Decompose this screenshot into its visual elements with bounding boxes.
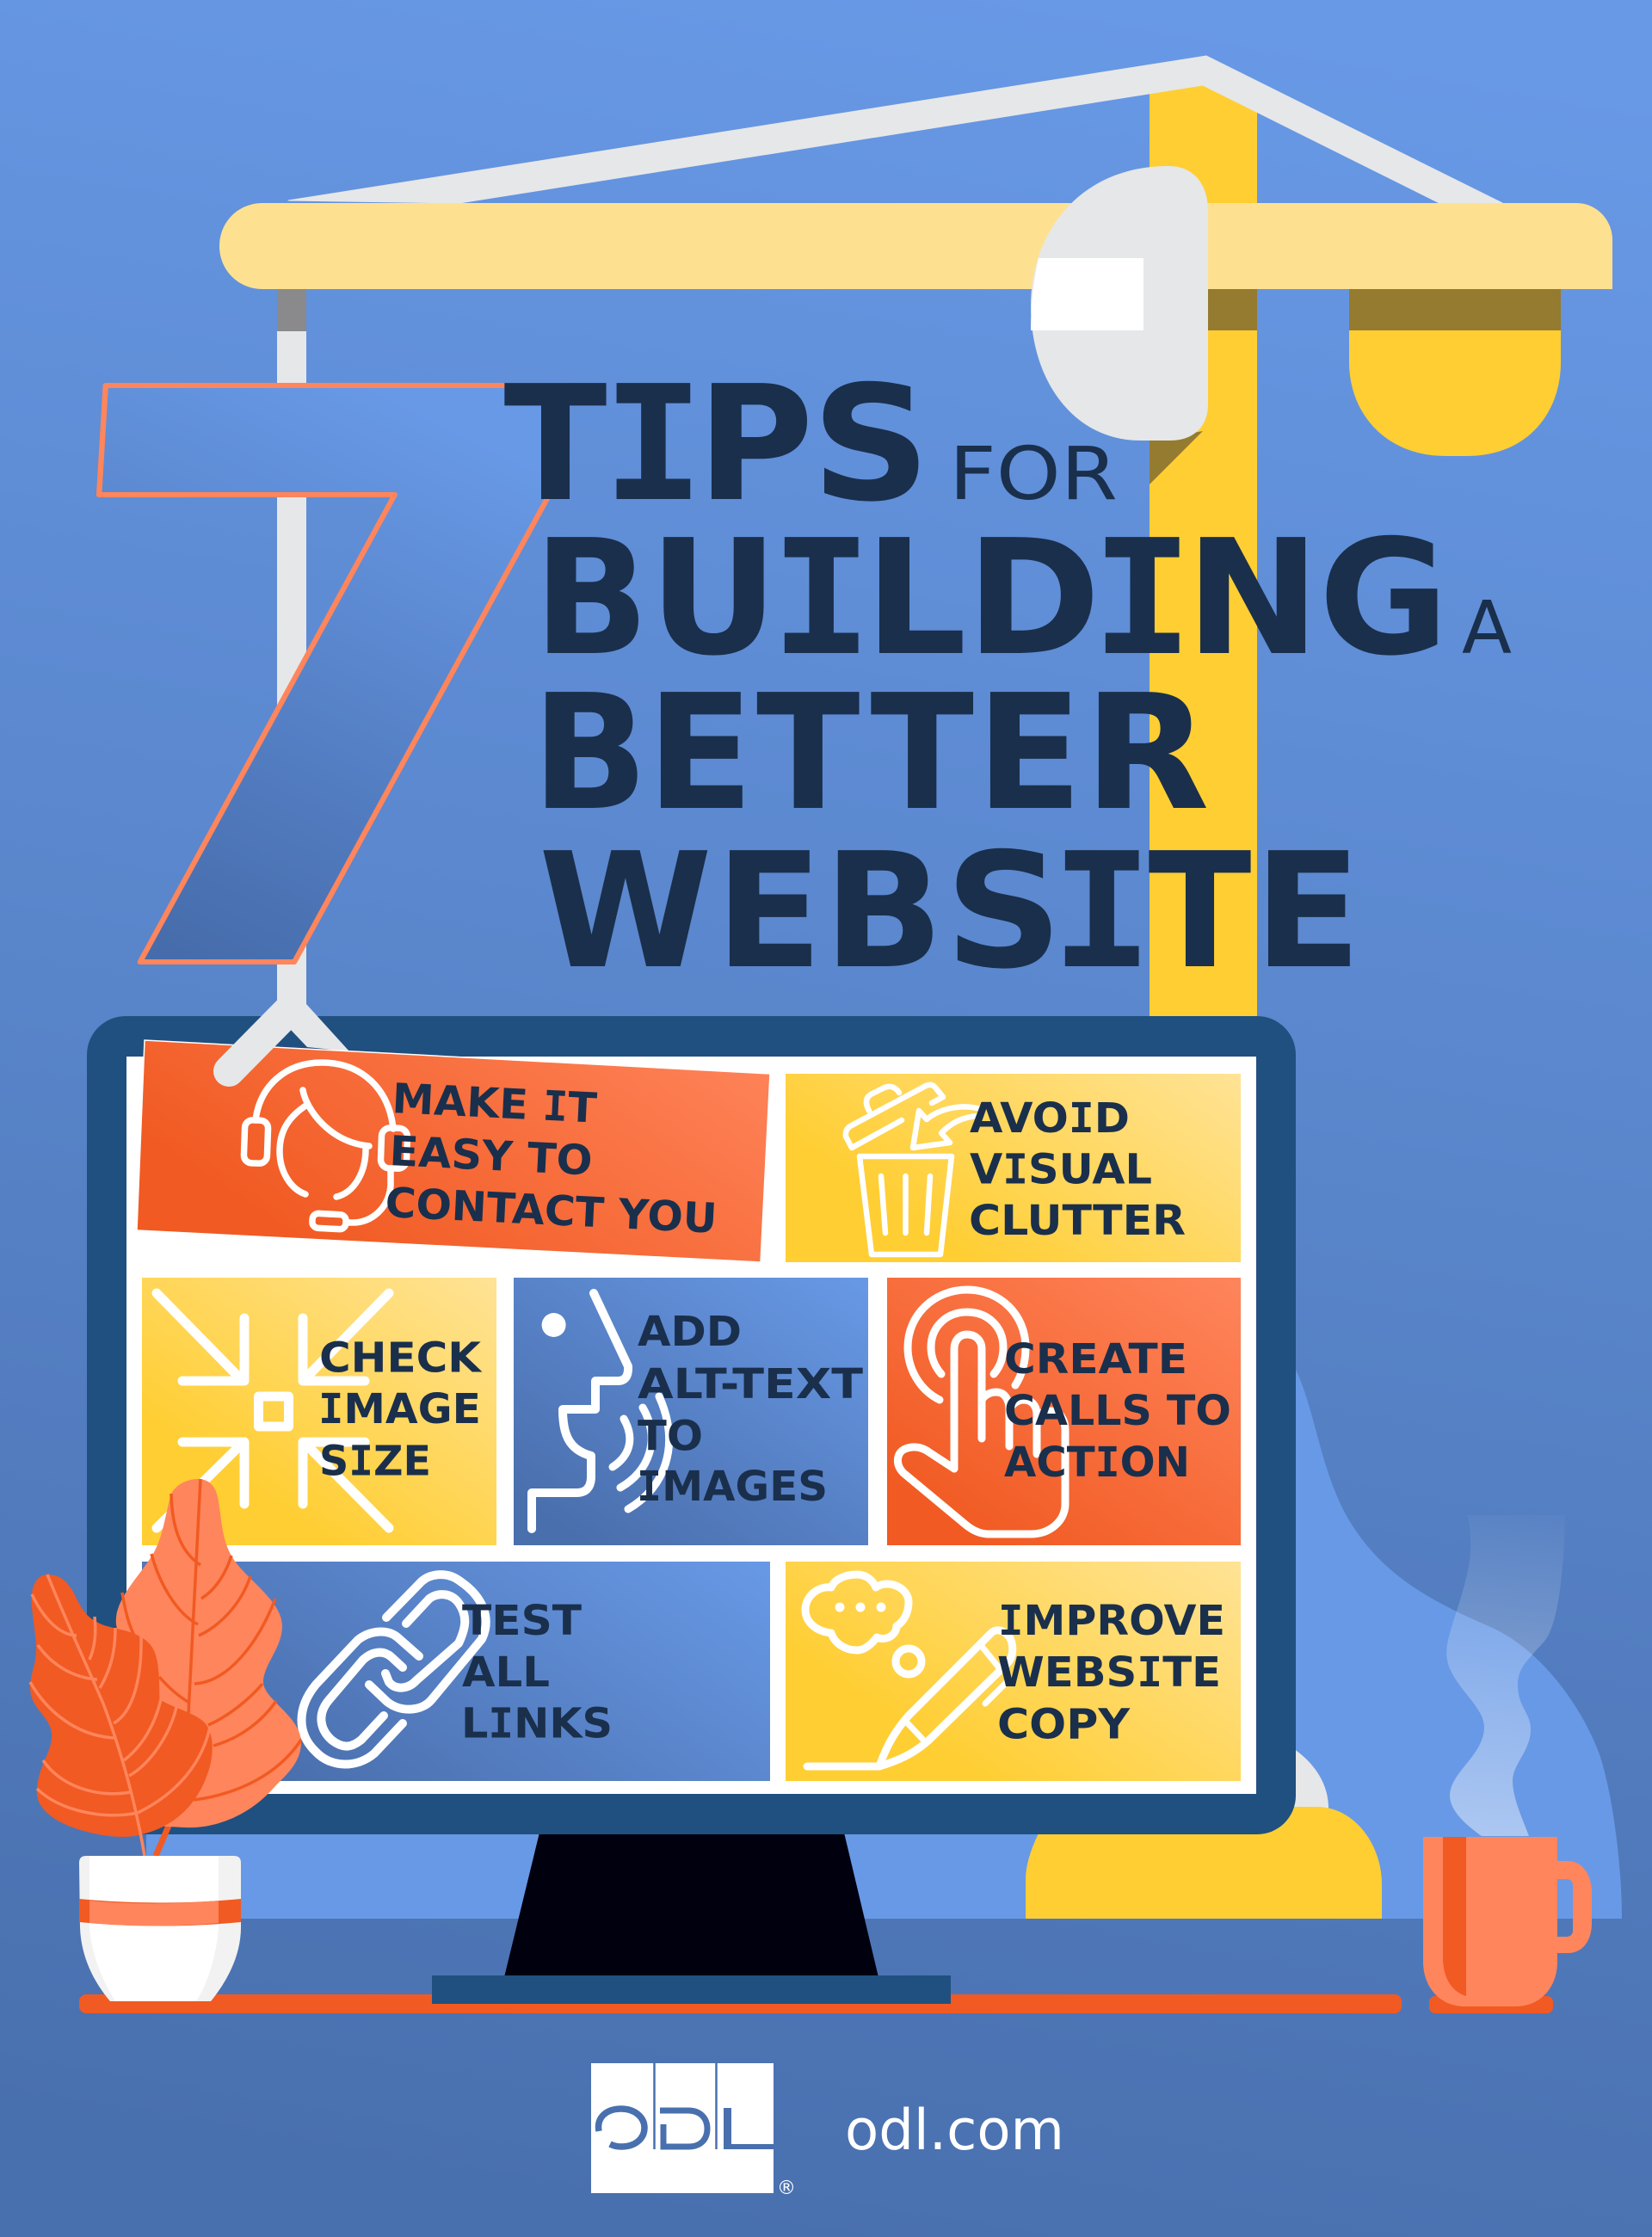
logo letter O: [599, 2109, 644, 2147]
tip text: LINKS: [461, 1700, 613, 1748]
tip text: IMAGES: [637, 1463, 828, 1511]
icon: headset agent: [243, 1063, 408, 1229]
desk surface: [79, 1994, 1402, 2013]
monitor frame: [87, 1016, 1296, 1834]
title line 4: I: [1051, 818, 1153, 1004]
tip text: AVOID: [970, 1094, 1130, 1143]
tip text: TEST: [462, 1597, 582, 1645]
title line 2: N: [1186, 505, 1320, 691]
title line 4: E: [1254, 818, 1361, 1004]
tip text: [318, 1334, 483, 1485]
tip text: [384, 1075, 718, 1243]
crane cabin: [1031, 166, 1208, 441]
title line 2: L: [865, 505, 967, 691]
logo square: [591, 2063, 774, 2193]
icon: thought cloud and pencil: [805, 1575, 1013, 1766]
tip text: CLUTTER: [969, 1197, 1186, 1245]
title line 3: E: [976, 660, 1082, 846]
tip text: CONTACT YOU: [384, 1179, 718, 1243]
coaster: [1429, 1996, 1553, 2013]
title line 1: FOR: [949, 432, 1118, 517]
back leaf: [116, 1479, 301, 1827]
panel: make it easy to contact you: [137, 1040, 770, 1262]
title line 1: I: [602, 351, 705, 537]
tip text: CHECK: [319, 1334, 483, 1382]
panel: test all links: [142, 1562, 770, 1781]
tip text: [1004, 1335, 1231, 1487]
title line 3: T: [756, 660, 860, 846]
ODL logo: [591, 2063, 796, 2199]
tip text: IMPROVE: [998, 1597, 1225, 1645]
monitor stand base: [432, 1975, 951, 2004]
title line 3: T: [871, 660, 974, 846]
tip text: [969, 1094, 1186, 1245]
counterweight shadow: [1349, 289, 1561, 330]
panel: create calls to action: [887, 1278, 1241, 1545]
logo dividers: [654, 2063, 716, 2149]
background hill: [146, 1368, 1622, 1919]
tip text: CALLS TO: [1004, 1387, 1231, 1435]
tip text: [461, 1597, 613, 1748]
mug handle: [1557, 1861, 1592, 1953]
tip text: SIZE: [319, 1437, 431, 1485]
title line 4: W: [539, 818, 712, 1004]
mug band: [1443, 1837, 1466, 1996]
crane arm shadow on tower: [1205, 289, 1257, 330]
crane hook left branch: [229, 1011, 288, 1071]
panel: improve website copy: [786, 1562, 1241, 1781]
steam: [1446, 1515, 1565, 1836]
rod lower part and right hook branch: [277, 331, 349, 1051]
stem: [156, 1826, 169, 1856]
title line 4: S: [945, 818, 1063, 1004]
tip text: ALL: [462, 1648, 550, 1697]
logo letter D: [660, 2111, 707, 2147]
crane hanging rod: [277, 289, 349, 1051]
title line 2: I: [770, 505, 872, 691]
tip text: EASY TO: [388, 1127, 594, 1186]
mug body: [1423, 1837, 1557, 2006]
tip text: COPY: [997, 1700, 1131, 1748]
tip text: ACTION: [1004, 1439, 1190, 1487]
tip text: ALT-TEXT: [638, 1360, 863, 1408]
pot: [79, 1856, 241, 2001]
panel: add alt-text to images: [514, 1278, 868, 1545]
icon: speaking profile: [532, 1293, 669, 1529]
icon: tapping hand: [897, 1290, 1065, 1534]
website address: odl.com: [845, 2098, 1064, 2163]
title line 2: [533, 505, 1512, 691]
panel: avoid visual clutter: [786, 1074, 1241, 1262]
tip text: VISUAL: [970, 1146, 1152, 1194]
tip text: [997, 1597, 1225, 1748]
title line 1: T: [504, 351, 607, 537]
icon: trash bin: [846, 1085, 981, 1254]
crane truss: [288, 56, 1502, 203]
title line 2: D: [966, 505, 1100, 691]
crane counterweight: [1349, 289, 1561, 456]
icon: shrink arrows: [157, 1293, 389, 1528]
monitor screen: [126, 1057, 1256, 1794]
crane tower: [1150, 82, 1257, 1020]
title line 2: B: [533, 505, 649, 691]
title line 3: B: [532, 660, 648, 846]
tip text: MAKE IT: [391, 1075, 598, 1133]
title line 1: S: [811, 351, 931, 537]
registered mark: ®: [777, 2178, 796, 2199]
title: [504, 351, 1512, 1004]
plant: [30, 1479, 301, 2001]
title line 1: [504, 351, 1118, 537]
cabin shadow on tower: [1150, 431, 1203, 484]
tip text: TO: [638, 1413, 703, 1461]
panel: check image size: [142, 1278, 496, 1545]
icon: chain links: [301, 1575, 486, 1765]
logo letter L: [724, 2108, 774, 2149]
title line 2: A: [1462, 586, 1512, 671]
monitor stand: [504, 1833, 878, 1977]
big outlined number 7: 7: [3, 229, 644, 1149]
tip text: IMAGE: [318, 1385, 481, 1433]
tip text: CREATE: [1004, 1335, 1187, 1383]
crane base dome: [1273, 1747, 1328, 1809]
tip text: WEBSITE: [997, 1648, 1221, 1697]
cabin window: [1031, 258, 1143, 330]
coffee mug: [1423, 1837, 1592, 2013]
title line 2: I: [1091, 505, 1193, 691]
title line 2: U: [649, 505, 778, 691]
crane base: [1026, 1807, 1382, 1919]
title line 4: E: [715, 818, 823, 1004]
front leaf: [30, 1575, 213, 1856]
title line 4: B: [823, 818, 944, 1004]
crane arm: [219, 203, 1612, 289]
title line 3: R: [1084, 660, 1210, 846]
tip text: [637, 1308, 863, 1511]
title line 3: E: [646, 660, 754, 846]
title line 2: G: [1318, 505, 1449, 691]
tip text: ADD: [638, 1308, 742, 1356]
title line 4: T: [1148, 818, 1251, 1004]
title line 1: P: [697, 351, 814, 537]
